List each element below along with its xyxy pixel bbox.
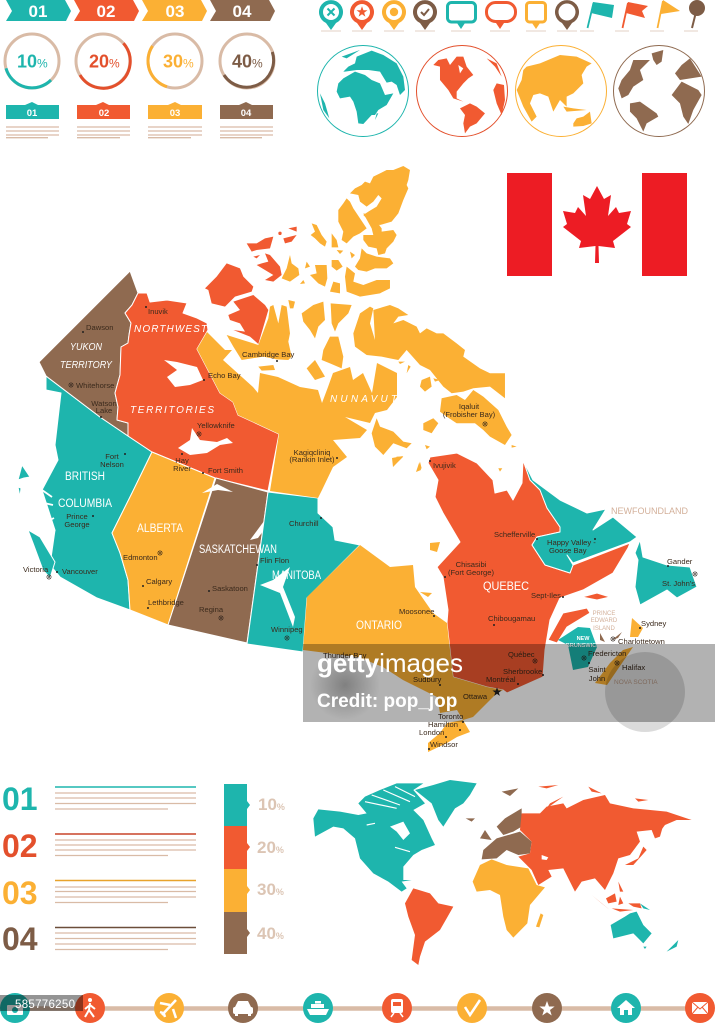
map labels: Québec [508, 650, 535, 659]
map labels: ONTARIO [356, 620, 402, 632]
map labels: Windsor [430, 740, 458, 749]
province: British Columbia [18, 376, 152, 610]
province: Quebec [428, 453, 630, 693]
stock watermark band: gettyimages [317, 648, 463, 678]
map labels: Sherbrooke [503, 667, 542, 676]
small tabs with text lines: 03 [170, 108, 180, 119]
map labels: Inuvik [148, 307, 168, 316]
globe: Americas [416, 46, 508, 136]
stacked percentage bar: 40% [257, 924, 284, 943]
map labels: Echo Bay [208, 371, 241, 380]
map labels: Sydney [641, 619, 667, 628]
map labels: COLUMBIA [58, 498, 112, 510]
map labels: Iqaluit [459, 402, 480, 411]
map labels: YUKON [70, 342, 103, 353]
map labels: Moosonee [399, 607, 434, 616]
map labels: Chisasibi [456, 560, 487, 569]
province: New Brunswick [558, 627, 597, 670]
map labels: TERRITORIES [130, 405, 214, 416]
territory: Nunavut [197, 166, 517, 597]
icon: train [382, 993, 412, 1023]
map labels: NEWFOUNDLAND [611, 506, 689, 516]
province: Labrador [523, 460, 637, 573]
map labels: Lake [96, 406, 112, 415]
map labels: PRINCE [593, 611, 615, 617]
map of Canada [18, 166, 697, 752]
small tabs with text lines [6, 102, 273, 138]
small tabs with text lines: 04 [241, 108, 252, 119]
map labels: Halifax [622, 663, 645, 672]
province: Alberta [112, 452, 215, 625]
map labels: EDWARD [591, 618, 618, 624]
map labels: Hamilton [428, 720, 458, 729]
icon: check mark [457, 993, 487, 1023]
map labels: ALBERTA [137, 523, 183, 535]
map labels: St. John's [662, 579, 695, 588]
map labels: Cambridge Bay [242, 350, 295, 359]
province: Northwest Territories [115, 227, 297, 491]
percentage rings: 30% [163, 52, 194, 72]
numbered list 01-04: 02 [2, 828, 38, 864]
map labels: Hay [175, 456, 189, 465]
map labels: Watson [91, 399, 117, 408]
map labels: Regina [199, 605, 224, 614]
map labels: Goose Bay [549, 546, 587, 555]
continent: Europe [466, 788, 532, 859]
map labels: Schefferville [494, 530, 535, 539]
map labels: Winnipeg [271, 625, 303, 634]
percentage rings: 20% [89, 52, 120, 72]
map labels: Calgary [146, 577, 172, 586]
icon: star [532, 993, 562, 1023]
chevron banners 01-04: 02 [97, 2, 115, 21]
icon: car [228, 993, 258, 1023]
numbered list 01-04: 04 [2, 921, 38, 957]
map labels: George [64, 520, 90, 529]
map labels: Churchill [289, 519, 319, 528]
map labels: Toronto [438, 712, 463, 721]
map labels: Sept-Iles [531, 591, 561, 600]
map labels: MANITOBA [272, 570, 321, 582]
province: Prince Edward Island [600, 632, 622, 642]
world map [313, 780, 692, 965]
map labels: (Rankin Inlet) [289, 455, 335, 464]
stacked percentage bar: 30% [257, 880, 284, 899]
map labels: Montréal [486, 675, 516, 684]
globe: Africa and Europe [318, 46, 408, 136]
small tabs with text lines: 01 [27, 108, 38, 119]
province: Newfoundland [635, 540, 697, 605]
continent: North America [313, 780, 477, 892]
map labels: Lethbridge [148, 598, 184, 607]
map labels: BRUNSWICK [566, 643, 600, 649]
chevron banners 01-04: 03 [166, 2, 184, 21]
numbered list 01-04 [2, 781, 196, 957]
small tabs with text lines: 02 [99, 108, 109, 119]
map labels: NEW [577, 636, 590, 642]
image id tag: 585776250 [15, 999, 75, 1011]
continent: Oceania [611, 903, 678, 952]
map labels [23, 306, 697, 750]
stacked percentage bar [224, 784, 285, 954]
map labels: Happy Valley - [547, 538, 596, 547]
map labels: (Frobisher Bay) [443, 410, 496, 419]
map labels: London [419, 728, 444, 737]
chevron banners 01-04 [6, 0, 275, 21]
province: Yukon [39, 271, 138, 436]
map labels: Saint [588, 665, 607, 674]
map labels: Vancouver [62, 567, 98, 576]
continent: South America [405, 888, 453, 965]
chevron banners 01-04: 01 [29, 2, 47, 21]
map labels: (Fort George) [448, 568, 494, 577]
stock watermark band [303, 644, 715, 732]
percentage rings [5, 34, 274, 88]
map labels: Gander [667, 557, 693, 566]
map labels: Sudbury [413, 675, 441, 684]
map pins and flags [319, 0, 705, 32]
map labels: Thunder Bay [323, 651, 367, 660]
province: Manitoba [247, 492, 360, 652]
numbered list 01-04: 01 [2, 781, 38, 817]
icon: envelope [685, 993, 715, 1023]
continent: Africa [473, 859, 545, 938]
map labels: Charlottetown [618, 637, 665, 646]
percentage rings: 10% [17, 52, 48, 72]
globe: Asia and Australia [516, 46, 606, 136]
map labels: Ottawa [463, 692, 488, 701]
chevron banners 01-04: 04 [233, 2, 252, 21]
globe: Atlantic view [614, 46, 704, 136]
icon timeline [0, 993, 715, 1023]
map labels: Whitehorse [76, 381, 114, 390]
map labels: NORTHWEST [134, 324, 208, 335]
map labels: NUNAVUT [330, 394, 398, 405]
image id tag [0, 995, 83, 1011]
icon: home [611, 993, 641, 1023]
map labels: QUEBEC [483, 581, 529, 593]
province: Ontario [303, 545, 503, 752]
map labels: John [589, 674, 605, 683]
map labels: Prince [66, 512, 88, 521]
continent: Asia [518, 785, 692, 912]
map labels: Edmonton [123, 553, 158, 562]
map labels: Victoria [23, 565, 49, 574]
map labels: ISLAND [593, 626, 615, 632]
map labels: Yellowknife [197, 421, 235, 430]
stacked percentage bar: 10% [258, 795, 285, 814]
icon: ship [303, 993, 333, 1023]
map labels: Flin Flon [260, 556, 289, 565]
numbered list 01-04: 03 [2, 875, 38, 911]
map labels: BRITISH [65, 471, 105, 483]
map labels: Fredericton [588, 649, 626, 658]
map labels: SASKATCHEWAN [199, 544, 277, 556]
map labels: NOVA SCOTIA [614, 679, 658, 686]
stock watermark band: Credit: pop_jop [317, 691, 457, 712]
province: Saskatchewan [168, 478, 268, 643]
stacked percentage bar: 20% [257, 838, 284, 857]
map labels: Dawson [86, 323, 113, 332]
province: Nova Scotia [595, 618, 643, 685]
icon: camera [0, 993, 30, 1023]
map labels: Kagiqcliniq [294, 448, 330, 457]
map labels: Fort Smith [208, 466, 243, 475]
map labels: Nelson [100, 460, 124, 469]
icon: airplane [154, 993, 184, 1023]
map labels: Fort [105, 452, 120, 461]
map labels: Ivujivik [433, 461, 456, 470]
map labels: TERRITORY [60, 360, 113, 371]
flag of Canada [507, 173, 687, 276]
map labels: Chibougamau [488, 614, 535, 623]
map labels: River [173, 464, 191, 473]
map labels: Saskatoon [212, 584, 248, 593]
icon: walking person [75, 993, 105, 1023]
percentage rings: 40% [232, 52, 263, 72]
